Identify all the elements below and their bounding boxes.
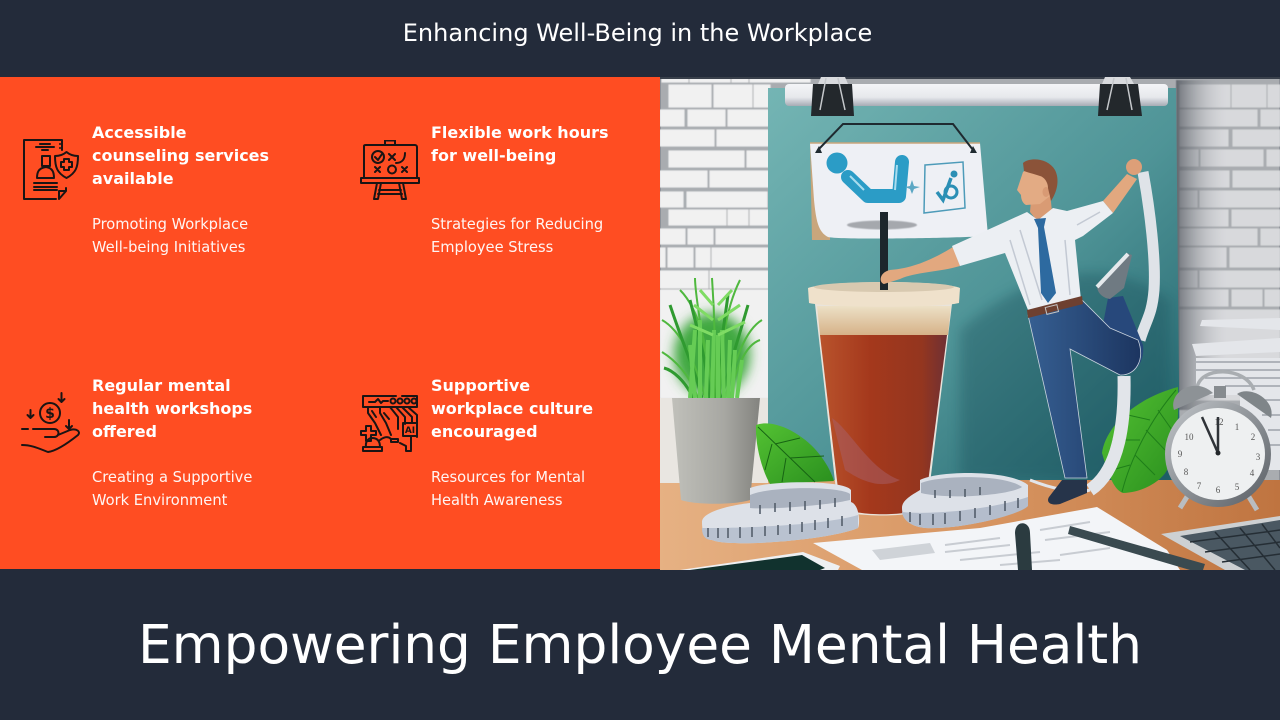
benefit card: supportive culture xyxy=(360,376,593,509)
hair xyxy=(1023,159,1058,201)
benefit card: workshops xyxy=(21,376,252,509)
description: Promoting Workplace xyxy=(92,216,248,233)
alarm clock: 7 xyxy=(1197,481,1202,491)
heading: for well-being xyxy=(431,146,556,165)
icon: AI circuit xyxy=(360,395,418,452)
calculator xyxy=(1161,516,1280,570)
brick wall xyxy=(660,77,1280,497)
description: Well-being Initiatives xyxy=(92,239,245,256)
alarm clock: 2 xyxy=(1251,432,1255,442)
shadow behind figure xyxy=(960,273,1170,480)
teal poster xyxy=(768,88,1180,480)
description: Creating a Supportive xyxy=(92,469,252,486)
left forearm xyxy=(881,247,960,284)
paper roll xyxy=(785,84,1168,106)
alarm clock: 9 xyxy=(1178,449,1183,459)
head xyxy=(1017,169,1050,205)
leaf left xyxy=(756,423,834,484)
drink cup xyxy=(808,212,960,516)
alarm clock: 8 xyxy=(1184,467,1189,477)
description: Employee Stress xyxy=(431,239,553,256)
tie xyxy=(1034,218,1056,303)
alarm clock: 3 xyxy=(1256,452,1261,462)
standing shoe xyxy=(1048,480,1087,505)
lying pen xyxy=(1068,526,1205,570)
sign icon: check box xyxy=(924,162,965,213)
heading: Regular mental xyxy=(92,376,231,395)
description: Work Environment xyxy=(92,492,227,509)
title: Enhancing Well-Being in the Workplace xyxy=(403,19,872,47)
heading: encouraged xyxy=(431,422,538,441)
binder clip left xyxy=(811,77,854,116)
alarm clock: 10 xyxy=(1184,432,1194,442)
bottom title band xyxy=(0,570,1280,720)
icon: hand with coin xyxy=(21,392,80,453)
wall strip behind desk left xyxy=(660,398,768,483)
alarm clock: 12 xyxy=(1214,417,1224,427)
right leaf xyxy=(1102,387,1178,493)
description xyxy=(92,216,248,256)
heading: workplace culture xyxy=(431,399,593,418)
tape measure right xyxy=(902,473,1028,528)
shirt xyxy=(952,201,1113,310)
alarm clock xyxy=(1165,372,1272,510)
icon: strategy board xyxy=(360,140,420,200)
panel: orange benefits xyxy=(0,77,660,569)
upright pen xyxy=(1015,523,1032,570)
top title band xyxy=(0,0,1280,77)
sign icon: reclining person xyxy=(826,152,848,174)
heading: health workshops xyxy=(92,399,252,418)
description xyxy=(431,469,585,509)
heading: Supportive xyxy=(431,376,530,395)
description: Resources for Mental xyxy=(431,469,585,486)
heading: available xyxy=(92,169,174,188)
description xyxy=(92,469,252,509)
heading: Flexible work hours xyxy=(431,123,608,142)
wall band at top xyxy=(660,77,1280,79)
icon: hand with coin: $ xyxy=(45,406,55,422)
desk documents xyxy=(813,507,1180,570)
icon: document with shield xyxy=(23,139,79,200)
description xyxy=(431,216,603,256)
belt xyxy=(1027,296,1083,318)
raised shoe xyxy=(1097,253,1132,299)
alarm clock: 4 xyxy=(1250,468,1255,478)
benefit card: counseling xyxy=(23,123,269,256)
heading xyxy=(92,123,269,188)
phone xyxy=(680,552,840,570)
heading xyxy=(431,123,608,165)
heading xyxy=(92,376,252,441)
stack of papers xyxy=(1192,318,1280,470)
description: Health Awareness xyxy=(431,492,562,509)
plant pot xyxy=(672,398,760,504)
icon: AI circuit: AI xyxy=(405,426,415,436)
alarm clock: 6 xyxy=(1216,485,1221,495)
neck xyxy=(1030,192,1052,222)
alarm clock: 1 xyxy=(1235,422,1239,432)
alarm clock: 5 xyxy=(1235,482,1240,492)
raised lower leg xyxy=(1100,296,1143,374)
hanging sign xyxy=(810,124,988,240)
heading: counseling services xyxy=(92,146,269,165)
illustration: office stretch scene xyxy=(660,77,1280,570)
ear xyxy=(1042,187,1050,197)
heading: Accessible xyxy=(92,123,187,142)
description: Strategies for Reducing xyxy=(431,216,603,233)
hanging measuring tape xyxy=(1030,172,1154,491)
main title: Empowering Employee Mental Health xyxy=(138,613,1142,676)
tape measure left xyxy=(702,482,859,543)
heading: offered xyxy=(92,422,157,441)
heading xyxy=(431,376,593,441)
right forearm xyxy=(1103,174,1137,213)
standing leg and hips xyxy=(1028,300,1141,478)
desk xyxy=(660,480,1280,570)
figure: man stretching xyxy=(881,159,1143,505)
benefit card: flexible hours xyxy=(360,123,608,256)
plant grass xyxy=(662,278,762,398)
straw xyxy=(880,212,888,290)
binder clip right xyxy=(1098,77,1142,116)
